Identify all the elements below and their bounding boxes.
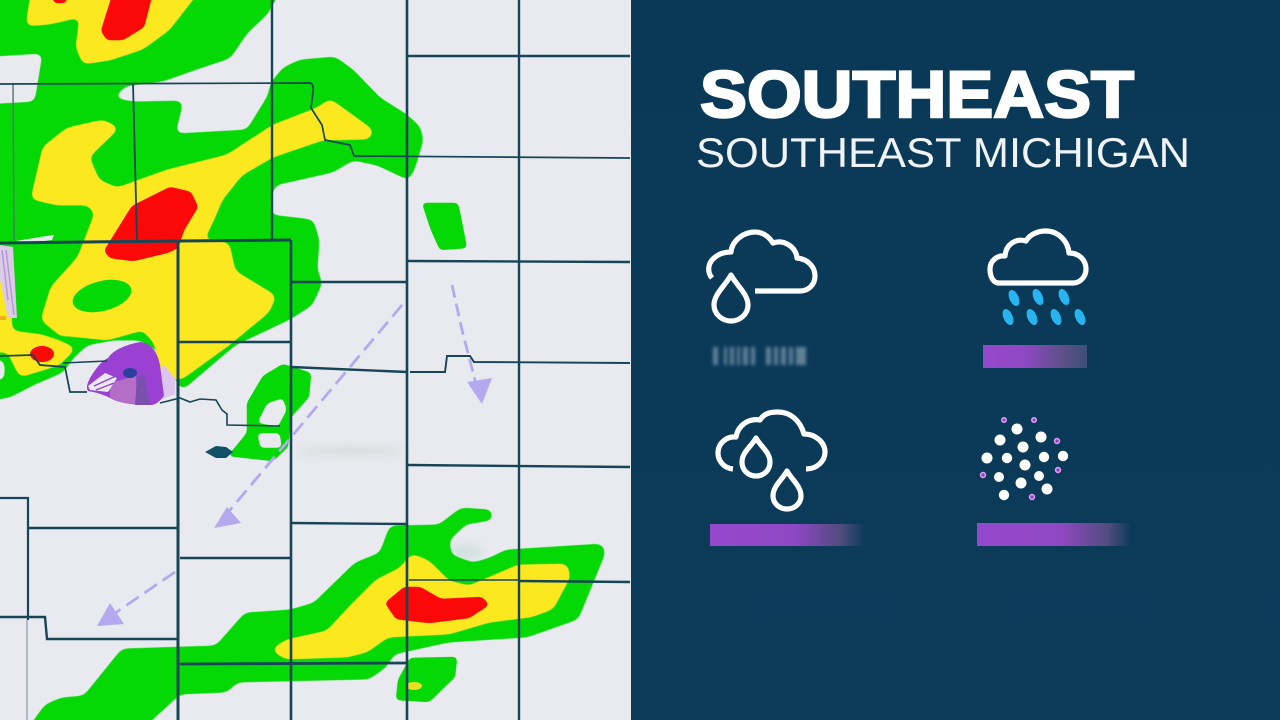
radar: red cell, south <box>385 587 489 623</box>
radar: small green cell, south <box>396 657 457 702</box>
arrow: dashed storm track to south <box>452 285 492 404</box>
radar: green rain band, south <box>20 508 605 720</box>
arrow: dashed storm track to southwest <box>214 305 402 528</box>
heading: SOUTHEAST <box>700 57 1134 131</box>
panel: forecast sidebar <box>631 0 1280 720</box>
radar: small white gap <box>16 235 54 243</box>
panel: radar map <box>0 0 632 720</box>
radar: yellow band, south <box>271 554 570 659</box>
subheading: SOUTHEAST MICHIGAN <box>696 129 1190 176</box>
purple intensity bar: snow <box>977 523 1130 546</box>
radar: red cells, north and central <box>48 0 198 261</box>
radar: green core in yellow <box>69 274 135 318</box>
haze patches <box>295 447 484 559</box>
icon: snow and hail dots <box>981 418 1068 500</box>
radar: small green cell, northeast <box>422 203 467 250</box>
blurred label <box>713 347 806 365</box>
radar: dark storm marker <box>205 446 233 458</box>
radar: purple hail core <box>87 342 175 405</box>
arrow: dashed storm track, far southwest <box>97 572 175 626</box>
icon: cloud with blue rain <box>990 231 1088 327</box>
icon: cloud with two drops <box>718 412 825 509</box>
purple intensity bar: showers <box>710 524 863 546</box>
radar: west lilac streak <box>0 245 17 320</box>
radar: yellow area, central <box>0 99 373 379</box>
radar: green rain area, north and central <box>0 0 423 402</box>
radar: tiny yellow spot <box>406 682 422 690</box>
pink specks <box>981 418 1060 499</box>
radar: red cell, west <box>30 346 54 362</box>
radar: green ring east of county line <box>228 364 311 461</box>
county grid lines <box>0 0 630 720</box>
icon: cloud with single drop <box>709 232 815 321</box>
rain drops <box>1000 287 1088 327</box>
purple intensity bar: rain <box>983 345 1087 368</box>
radar: yellow area, north <box>26 0 208 64</box>
